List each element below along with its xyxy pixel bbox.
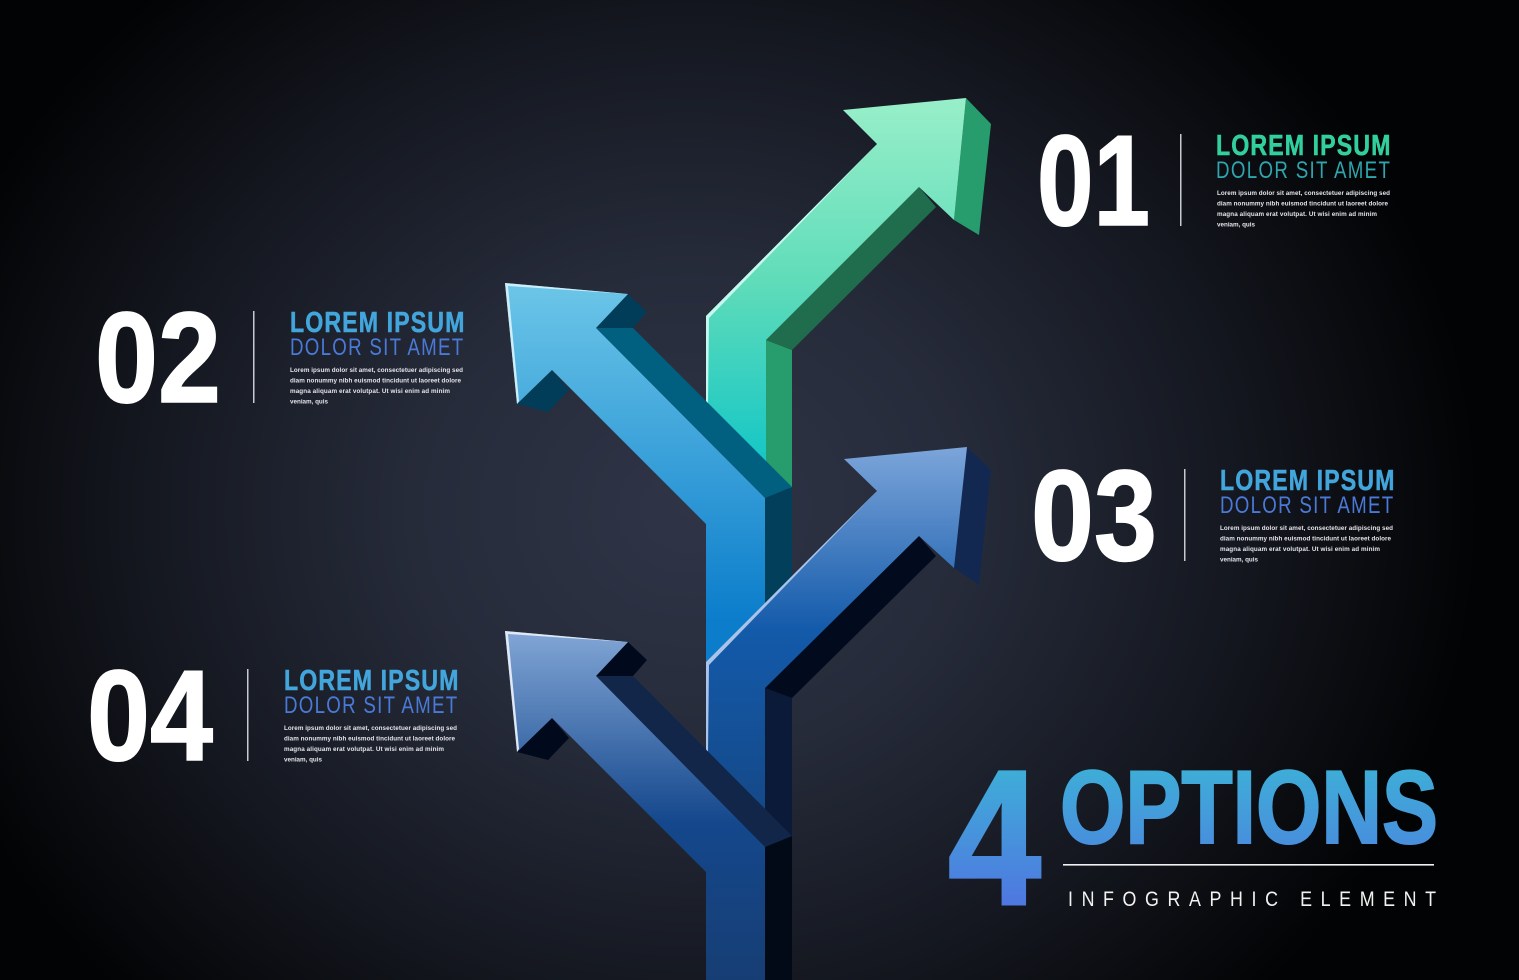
body text 02: magna aliquam erat volutpat. Ut wisi enim ad minim [290, 388, 450, 395]
body text 01: veniam, quis [1217, 222, 1255, 228]
body text 03: diam nonummy nibh euismod tincidunt ut laoreet dolore [1220, 536, 1391, 542]
body text 01: diam nonummy nibh euismod tincidunt ut laoreet dolore [1217, 200, 1388, 208]
number 03: 03 [1031, 444, 1157, 588]
heading 02: DOLOR SIT AMET [290, 334, 463, 361]
body text 04 [284, 725, 457, 764]
arrow 03: mid blue [706, 447, 991, 847]
body text 03: Lorem ipsum dolor sit amet, consectetuer adipiscing sed [1220, 525, 1393, 532]
arrow 04: dark blue [505, 631, 792, 980]
body text 03 [1220, 525, 1393, 564]
body text 04: Lorem ipsum dolor sit amet, consectetuer adipiscing sed [284, 725, 457, 732]
number 01: 01 [1037, 109, 1150, 253]
word OPTIONS: OPTIONS [1060, 750, 1438, 866]
body text 04: magna aliquam erat volutpat. Ut wisi enim ad minim [284, 746, 444, 753]
heading 03: LOREM IPSUM [1220, 463, 1394, 497]
body text 03: magna aliquam erat volutpat. Ut wisi enim ad minim [1220, 546, 1380, 553]
body text 04: diam nonummy nibh euismod tincidunt ut laoreet dolore [284, 736, 455, 742]
heading 01 [1216, 128, 1390, 184]
body text 01: Lorem ipsum dolor sit amet, consectetuer adipiscing sed [1217, 190, 1390, 197]
heading 01: LOREM IPSUM [1216, 128, 1390, 162]
body text 02 [290, 367, 463, 406]
heading 02: LOREM IPSUM [290, 305, 464, 339]
heading 03 [1220, 463, 1394, 519]
option 02 block [95, 286, 464, 430]
heading 04 [284, 663, 458, 719]
number 02: 02 [95, 286, 221, 430]
title: 4 OPTIONS [948, 730, 1438, 945]
big numeral 4: 4 [948, 730, 1041, 945]
heading 02 [290, 305, 464, 361]
body text 01 [1217, 190, 1390, 228]
number 04: 04 [87, 644, 213, 788]
option 01 block [1037, 109, 1390, 253]
body text 02: diam nonummy nibh euismod tincidunt ut laoreet dolore [290, 378, 461, 384]
option 04 block [87, 644, 458, 788]
body text 01: magna aliquam erat volutpat. Ut wisi enim ad minim [1217, 211, 1377, 218]
subtitle: INFOGRAPHIC ELEMENT [1068, 888, 1436, 911]
arrow 01: green [706, 98, 991, 490]
body text 03: veniam, quis [1220, 556, 1258, 564]
heading 03: DOLOR SIT AMET [1220, 492, 1393, 519]
body text 04: veniam, quis [284, 756, 322, 764]
heading 04: DOLOR SIT AMET [284, 692, 457, 719]
heading 01: DOLOR SIT AMET [1216, 157, 1390, 184]
body text 02: veniam, quis [290, 398, 328, 406]
option 03 block [1031, 444, 1394, 588]
heading 04: LOREM IPSUM [284, 663, 458, 697]
body text 02: Lorem ipsum dolor sit amet, consectetuer adipiscing sed [290, 367, 463, 374]
arrow 02: light blue [505, 283, 792, 670]
